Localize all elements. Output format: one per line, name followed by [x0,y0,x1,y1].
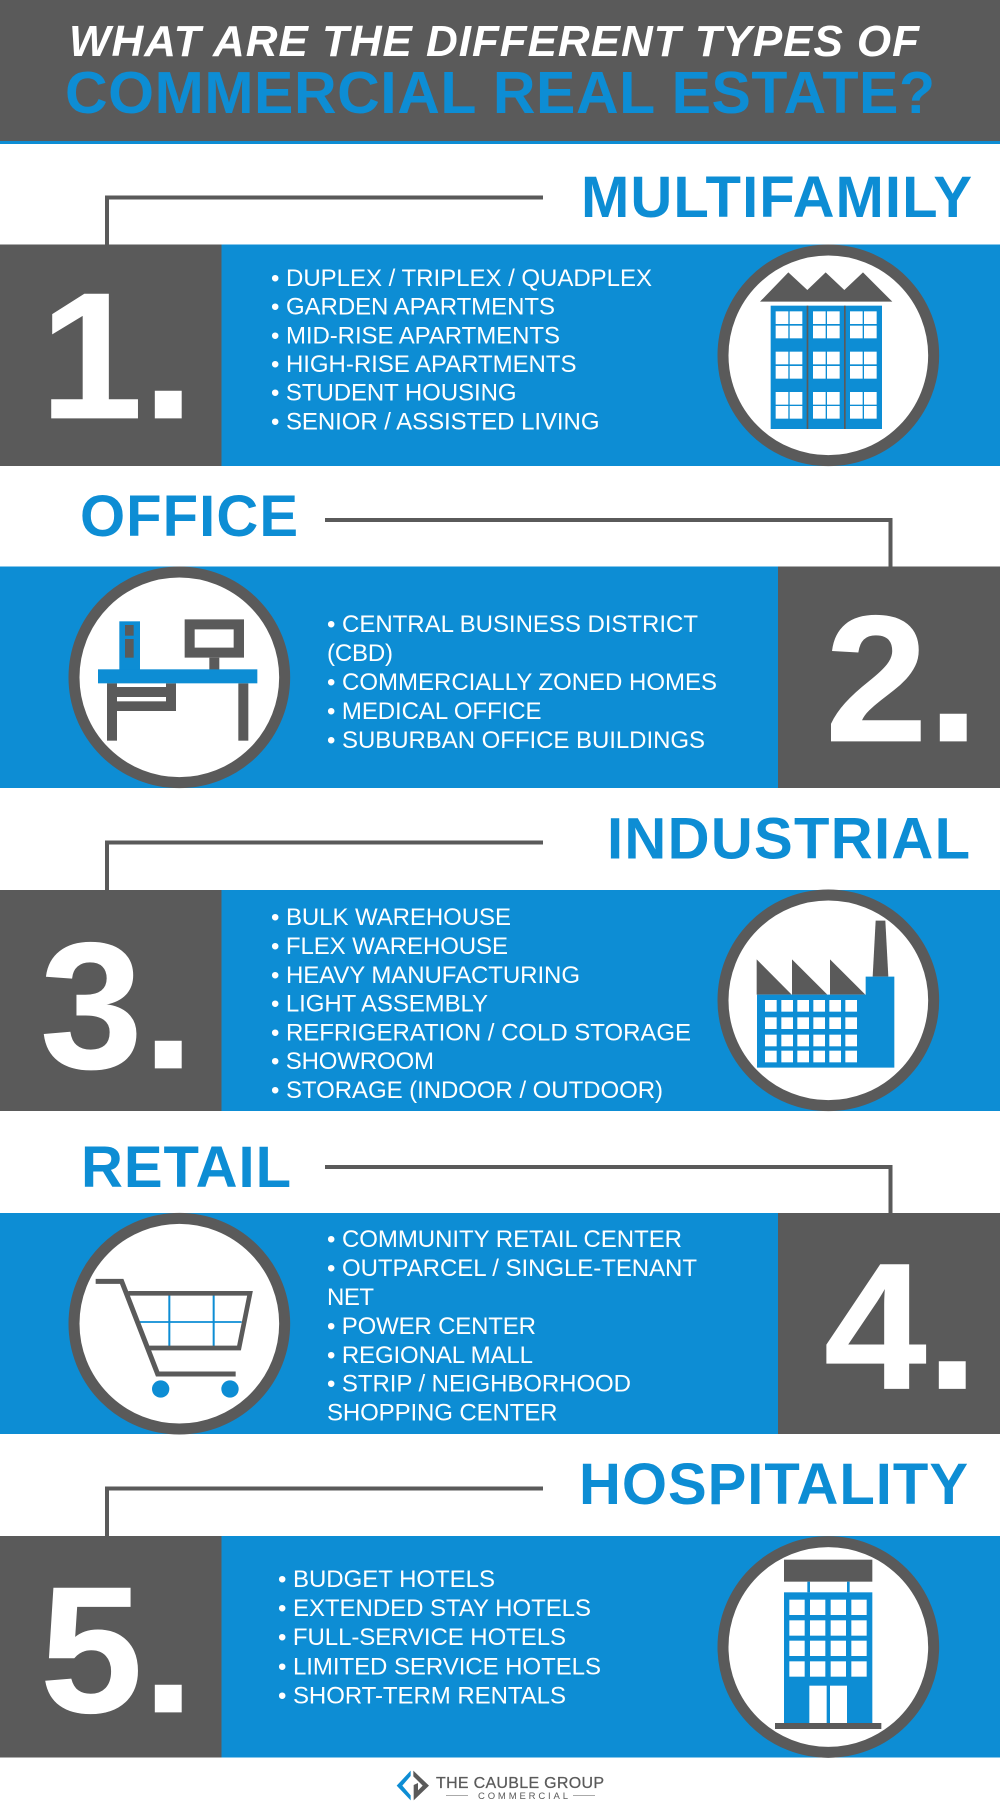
list: multifamily types: • SENIOR / ASSISTED LIVING [271,408,600,436]
list: office types: • COMMERCIALLY ZONED HOMES [327,669,717,696]
list: office types: • SUBURBAN OFFICE BUILDINGS [327,727,705,754]
list: retail types: • POWER CENTER [327,1313,536,1340]
list: office types: (CBD) [327,640,393,667]
number block 3 [0,890,222,1111]
list: multifamily types: • GARDEN APARTMENTS [271,294,555,321]
list: office types: • MEDICAL OFFICE [327,698,542,725]
number block 4 [778,1213,1000,1434]
heading: industrial: INDUSTRIAL [607,806,970,872]
logo name: THE CAUBLE GROUP [436,1775,604,1792]
list: hospitality types [278,1566,601,1709]
heading: hospitality: HOSPITALITY [579,1452,968,1517]
list: retail types: SHOPPING CENTER [327,1400,558,1427]
list: industrial types: • STORAGE (INDOOR / OUTDOOR) [271,1077,663,1104]
logo subtitle: COMMERCIAL [478,1791,568,1802]
section 5: hospitality [0,1452,1000,1758]
title line 2: COMMERCIAL REAL ESTATE? [65,60,935,126]
list: industrial types: • SHOWROOM [271,1048,434,1075]
section 4: retail [0,1135,1000,1434]
number block 2: 2. [825,579,979,780]
icon: apartment building [723,250,934,461]
heading: office: OFFICE [80,484,298,549]
list: industrial types: • FLEX WAREHOUSE [271,933,508,960]
section 3: industrial [0,806,1000,1111]
list: retail types: • REGIONAL MALL [327,1342,533,1369]
list: office types [327,611,717,754]
icon: office desk [74,572,285,783]
number block 1: 1. [40,256,194,457]
list: multifamily types: • DUPLEX / TRIPLEX / QUADPLEX [271,265,652,292]
list: hospitality types: • EXTENDED STAY HOTELS [278,1595,591,1622]
list: multifamily types: • HIGH-RISE APARTMENTS [271,351,576,378]
connector line 2 [325,520,890,568]
icon: factory [723,895,934,1106]
list: retail types: • COMMUNITY RETAIL CENTER [327,1226,682,1253]
list: multifamily types: • STUDENT HOUSING [271,380,516,407]
connector line 3 [107,842,543,891]
logo mark [397,1771,429,1800]
list: retail types: • STRIP / NEIGHBORHOOD [327,1371,631,1398]
list: industrial types: • BULK WAREHOUSE [271,904,511,931]
list: industrial types: • LIGHT ASSEMBLY [271,991,488,1018]
list: retail types: NET [327,1284,374,1311]
list: hospitality types: • BUDGET HOTELS [278,1566,495,1593]
list: multifamily types [271,265,652,436]
list: industrial types [271,904,691,1104]
list: office types: • CENTRAL BUSINESS DISTRICT [327,611,698,638]
icon: hotel [723,1542,934,1752]
number block 1 [0,244,222,466]
connector line 1 [107,198,543,245]
connector line 5 [107,1488,543,1537]
list: industrial types: • HEAVY MANUFACTURING [271,962,580,989]
panel background 4 [0,1213,1000,1434]
panel background 5 [0,1536,1000,1758]
number block 2 [778,566,1000,788]
number block 5 [0,1536,222,1758]
heading: retail: RETAIL [81,1135,291,1200]
section 2: office [0,484,1000,788]
number block 5: 5. [40,1550,194,1751]
heading: multifamily: MULTIFAMILY [581,165,972,230]
footer logo [397,1771,604,1802]
header banner [0,0,1000,144]
list: industrial types: • REFRIGERATION / COLD STORAGE [271,1020,691,1046]
panel background 2 [0,566,1000,788]
list: hospitality types: • SHORT-TERM RENTALS [278,1682,566,1709]
icon: shopping cart [74,1218,285,1429]
number block 3: 3. [40,906,194,1107]
number block 4: 4. [824,1226,978,1428]
panel background 1 [0,244,1000,466]
list: hospitality types: • FULL-SERVICE HOTELS [278,1624,566,1651]
connector line 4 [325,1167,890,1214]
section 1: multifamily [0,165,1000,466]
list: hospitality types: • LIMITED SERVICE HOTELS [278,1654,601,1680]
list: retail types: • OUTPARCEL / SINGLE-TENANT [327,1255,697,1282]
title line 1: WHAT ARE THE DIFFERENT TYPES OF [69,17,920,66]
list: retail types [327,1226,697,1427]
panel background 3 [0,890,1000,1111]
list: multifamily types: • MID-RISE APARTMENTS [271,322,560,350]
